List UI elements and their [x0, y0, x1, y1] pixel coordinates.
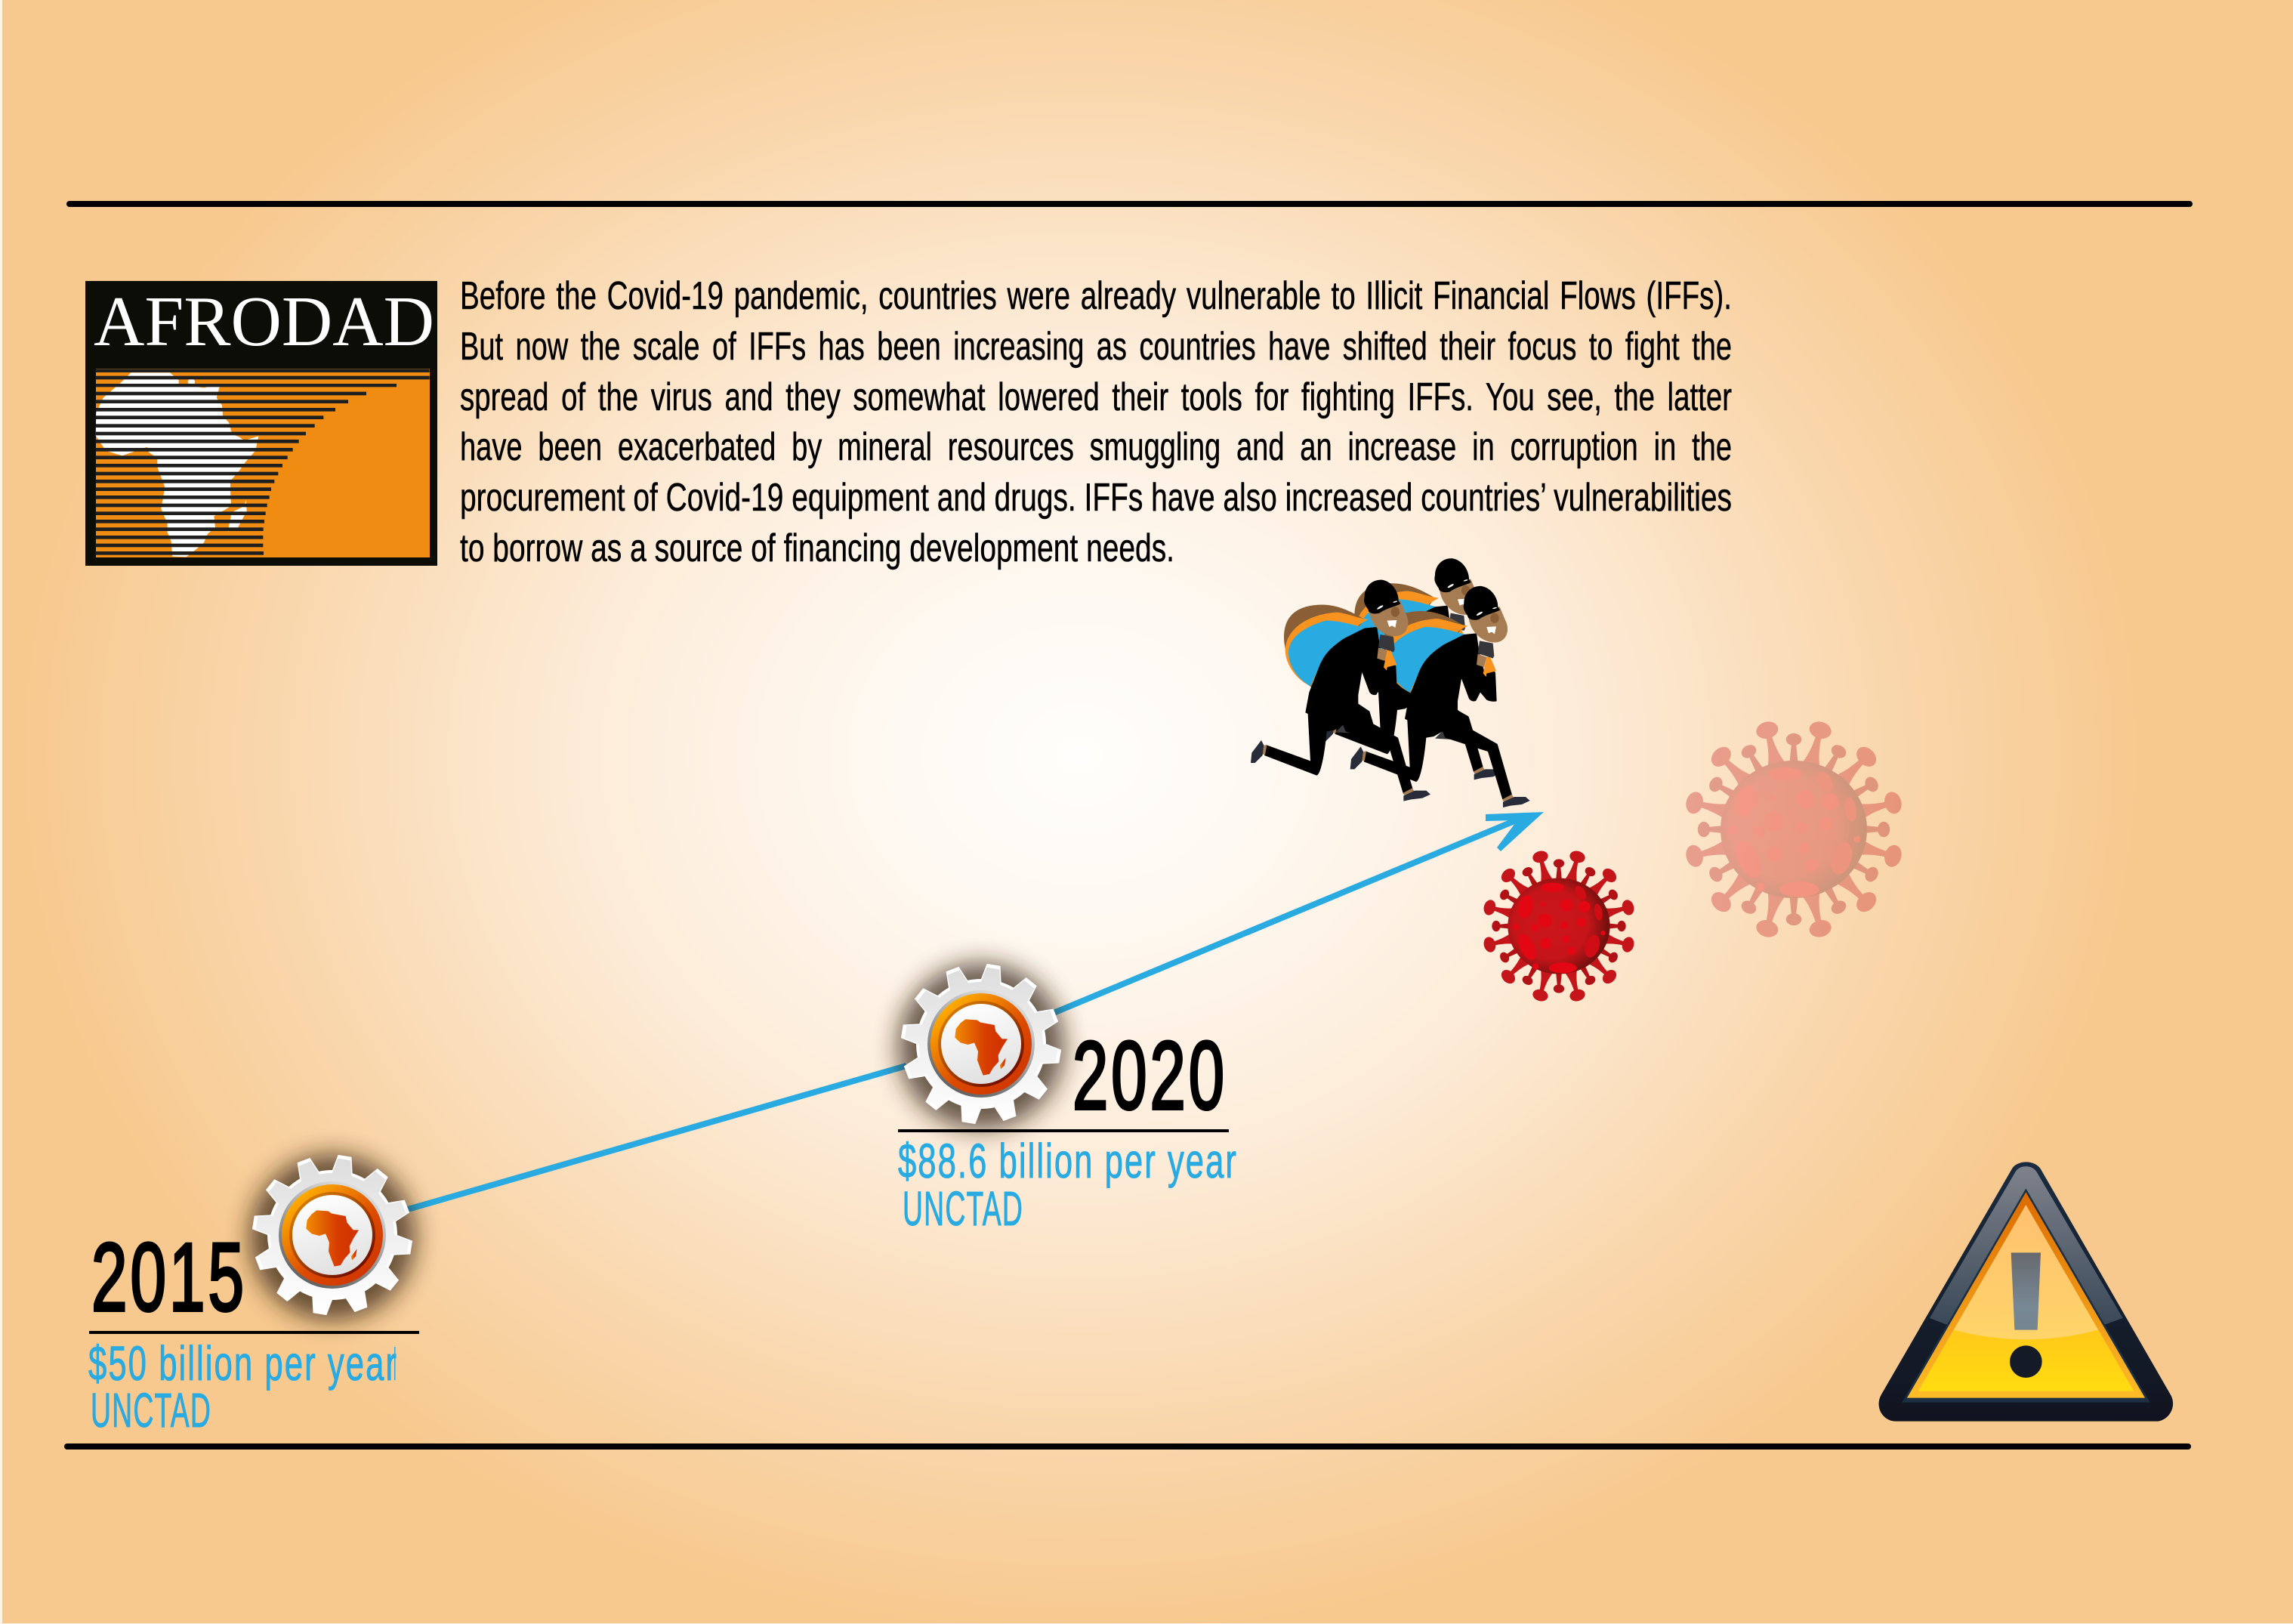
intro paragraph: to borrow as a source of financing development needs. [460, 526, 1174, 570]
intro paragraph [460, 274, 1732, 570]
arrow: growth 2020 onward [1054, 812, 1544, 1013]
intro paragraph: But now the scale of IFFs has been increasing as countries have shifted their focus to fight the [460, 325, 1732, 369]
intro paragraph: procurement of Covid-19 equipment and drugs. IFFs have also increased countries’ vulnerabilities [460, 476, 1732, 520]
value 2015: $50 billion per year [88, 1336, 398, 1391]
icon: gear 2020 [898, 961, 1064, 1129]
value 2015 [88, 1336, 398, 1437]
divider 2020 [898, 1129, 1229, 1132]
divider 2015 [89, 1331, 419, 1334]
value 2020: $88.6 billion per year [898, 1134, 1238, 1188]
icon: faded virus [1683, 719, 1904, 940]
arrow: growth 2015 to 2020 [408, 1066, 906, 1209]
year 2020: 2020 [1072, 1022, 1227, 1130]
icon: running thieves with sacks [1251, 558, 1530, 807]
value 2015: UNCTAD [91, 1383, 211, 1437]
logo: AFRODAD: AFRODAD [94, 283, 434, 361]
icon: red virus [1482, 849, 1636, 1003]
intro paragraph: have been exacerbated by mineral resources smuggling and an increase in corruption in the [460, 425, 1732, 469]
value 2020: UNCTAD [903, 1181, 1023, 1236]
intro paragraph: spread of the virus and they somewhat lowered their tools for fighting IFFs. You see, the latter [460, 375, 1732, 419]
icon: gear 2015 [249, 1152, 415, 1320]
logo: AFRODAD [85, 281, 437, 566]
icon: warning triangle [1879, 1162, 2173, 1422]
bottom rule [64, 1443, 2191, 1450]
top rule [66, 201, 2193, 207]
intro paragraph: Before the Covid-19 pandemic, countries were already vulnerable to Illicit Financial Flows (IFFs). [460, 274, 1732, 318]
value 2020 [898, 1134, 1238, 1236]
year 2015: 2015 [91, 1224, 247, 1332]
